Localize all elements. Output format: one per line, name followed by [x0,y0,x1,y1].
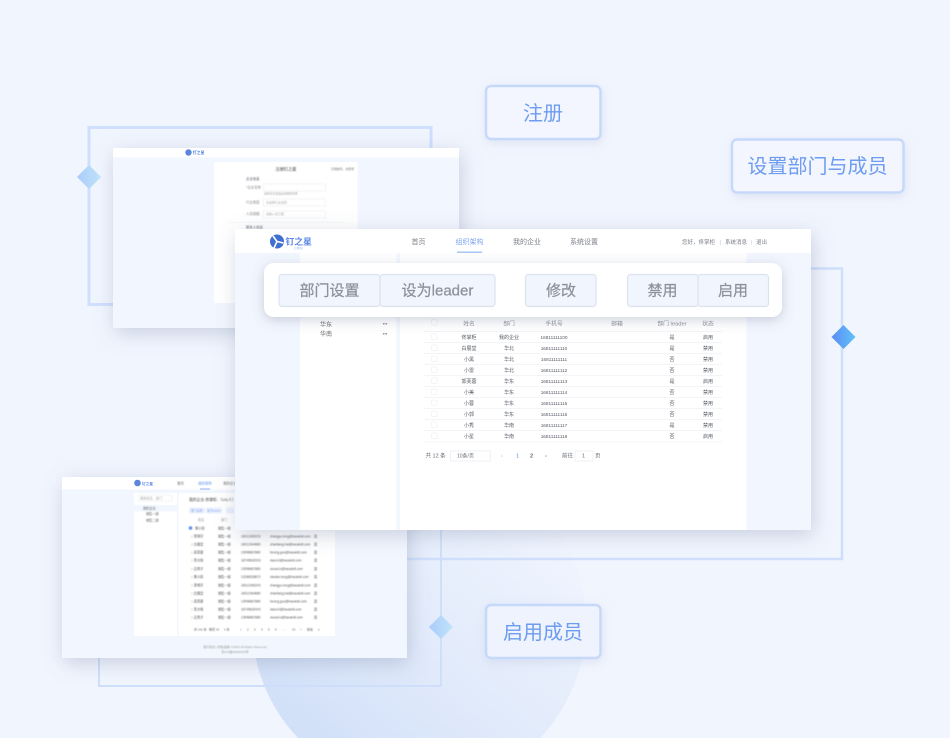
table rows: 禁用 [703,423,713,429]
table rows: 否 [669,401,675,407]
panel: members screenshot: dazui.li@baoalott.com [270,558,302,562]
panel: members screenshot: 销售一部 [218,614,232,620]
logo small: 钉之星 [142,481,153,486]
table rows: 否 [669,357,675,363]
table rows: 佟掌柜 [461,334,477,341]
table rows: 华南 [504,422,514,429]
pagination: 1 [516,454,519,460]
panel: members screenshot: 18745632003 [241,558,261,562]
table rows: 16811111115 [541,401,568,406]
panel: members screenshot: 13998667880 [241,616,261,620]
panel: members screenshot: 销售一部 [218,598,232,604]
table rows: 16811111111 [541,357,568,362]
panel: members screenshot: 销售一部 [218,534,232,538]
panel: members screenshot: 销售一部 [218,582,232,588]
user menu: 系统消息 [725,238,748,246]
table rows: 16811111112 [541,368,568,373]
logo: 钉之星 [286,236,312,246]
panel: members screenshot: 前往 [307,626,313,632]
panel: members screenshot: 1 [240,628,242,632]
register form: 企业信息 [246,176,260,181]
table rows: 16811111100 [541,335,568,340]
panel: members screenshot: 我的企业-佟掌柜-（141人） [189,497,236,502]
logo small: 钉之星 [193,150,205,155]
panel: members screenshot: 13 [292,628,296,632]
user menu: 您好，佟掌柜 [682,238,716,246]
logo small [185,149,205,156]
table rows: 禁用 [703,401,713,407]
table rows: 华南 [504,433,514,440]
user menu [682,238,767,246]
table rows: 华东 [504,411,514,418]
panel: members screenshot: 销售一部 [218,558,232,562]
pagination: 2 [530,454,533,460]
label: set departments and members [732,140,904,192]
panel: members screenshot: 2 [247,628,249,632]
table rows: 小黑 [464,356,474,363]
panel: members screenshot: 销售二部 [146,518,160,522]
button: disable: 禁用 [647,282,678,300]
table rows: 小秀 [464,422,474,429]
panel: members screenshot: 销售一部 [218,526,232,530]
panel: members screenshot: xiaolan.tong@baoalott.com [270,575,309,579]
button: disable [628,274,698,306]
table rows [461,334,713,440]
frame: department setup [400,268,842,559]
panel: members screenshot: 部门设置 [191,508,203,512]
panel: members screenshot: zhanliang.bai@baoalott.com [270,592,311,596]
footer: 帮行协议 | 隐私政策 ©2020 All Rights Reserved [203,644,267,649]
panel: members screenshot: xiucai.lv@baoalott.com [270,567,303,571]
table rows: 否 [669,390,675,396]
panel: members screenshot: 13998667880 [241,567,261,571]
table rows: 我的企业 [499,334,519,341]
member table [178,493,335,636]
panel: members screenshot: ○ 李明宇 [191,534,203,538]
panel: members screenshot: 是 [314,590,318,596]
logo small [134,480,153,486]
register form: 人员规模 [246,211,260,216]
panel: register screenshot [113,148,459,328]
table rows: 启用 [703,378,713,385]
panel: members screenshot: 共 141 条 [194,626,207,632]
button: enable: 启用 [718,282,748,300]
department tree [134,493,177,636]
panel: members screenshot: 1 [318,628,320,632]
panel: members screenshot: 每页 10 [209,626,220,632]
decorative circle [252,456,586,738]
panel: members screenshot: ○ 白展堂 [191,542,203,546]
panel: members screenshot: ○ 李大嘴 [191,606,204,612]
nav: 首页 [177,480,184,486]
frame: register [89,128,431,304]
panel: members screenshot: 4 [261,628,263,632]
panel: members screenshot: > [300,628,302,632]
member table panel [400,253,746,530]
register form: 联系人信息 [246,224,264,230]
table header: 手机号 [545,320,563,328]
department tree panel: ••• [383,322,388,326]
table header [463,320,714,328]
panel: members screenshot: 13998667880 [241,600,261,604]
panel: members screenshot: xiucai.lv@baoalott.com [270,616,303,620]
button: set as leader [380,274,495,306]
department tree panel: 华南 [320,330,332,338]
table rows: 小星 [464,433,474,440]
panel: members screenshot: 18312344880 [241,542,261,546]
table rows: 16811111116 [541,412,568,417]
panel: members screenshot: 销售一部 [218,590,232,596]
panel: members screenshot: 董小宛 [195,526,205,530]
table rows: 小雷 [464,367,474,374]
pagination: 共 12 条 [426,452,446,460]
table rows: 启用 [703,433,713,440]
table header: 状态 [702,320,714,328]
panel: members screenshot: 部门 [221,517,227,522]
table rows: 小郭 [464,411,474,418]
panel: members screenshot: zhangyu.long@baoalott.com [270,584,311,588]
panel: members screenshot: 是 [314,550,318,554]
table header: 姓名 [463,320,475,328]
table header: 邮箱 [611,320,623,328]
frame: enable members [99,500,441,686]
panel: members screenshot [62,477,407,658]
panel: members screenshot: ○ 郭芙蓉 [191,550,204,554]
table header: 部门 [503,320,515,328]
button: department settings: 部门设置 [299,282,360,300]
table rows: 郭芙蓉 [461,378,477,385]
logo [270,234,312,250]
panel: members screenshot: 18312344880 [241,592,261,596]
panel: members screenshot: ○ 吕秀才 [191,614,203,620]
panel: members screenshot: 销售一部 [218,550,232,554]
register form: *企业名称 [246,184,261,190]
table rows: 启用 [703,334,713,341]
panel: members screenshot: 是 [314,582,318,588]
panel: members screenshot: 是 [314,598,318,604]
panel: members screenshot: 18745632003 [241,608,261,612]
panel: members screenshot: 18312345203 [241,584,261,588]
department tree panel [300,253,396,530]
department tree panel: 华东 [320,320,332,328]
panel: members screenshot: 6 [275,628,277,632]
panel: members screenshot: 13998667880 [241,550,261,554]
label: enable members: 启用成员 [503,621,583,644]
panel: members screenshot: ○ 郭芙蓉 [191,598,204,604]
panel: members screenshot: furong.guo@baoalott.com [270,600,307,604]
pagination [426,451,601,461]
table rows: 华北 [504,367,514,374]
nav: 首页 [412,237,426,246]
panel: members screenshot: 搜索姓名、部门 [140,496,162,500]
toolbar [264,263,782,317]
panel: members screenshot: 是 [314,574,318,579]
nav: 我的企业 [223,480,237,486]
table rows: 是 [669,346,675,352]
table rows: 16811111110 [541,346,568,351]
panel: members screenshot: 设为leader [207,508,221,512]
panel: members screenshot: zhanliang.bai@baoalott.com [270,542,311,546]
register form: 请输入员工数 [266,211,284,216]
table rows: 华东 [504,389,514,396]
register form: 已有帐号，去登录 [331,166,354,171]
register form: 请填写企业营业执照的名称 [264,192,298,196]
pagination: › [545,454,547,460]
panel: members screenshot: ○ 白展堂 [191,590,203,596]
nav: 组织架构 [456,237,484,246]
panel: members screenshot: 是 [314,606,318,612]
table rows: 小美 [464,389,474,396]
panel: members screenshot: 是 [314,614,318,620]
table rows: 16811111113 [541,379,568,384]
button: department settings [279,274,380,306]
table rows: 禁用 [703,390,713,396]
pagination: ‹ [501,454,503,460]
panel: members screenshot: ○ 李明宇 [191,582,203,588]
nav [412,237,598,246]
button: enable [698,274,768,306]
table rows: 禁用 [703,368,713,374]
table rows: 否 [669,412,675,418]
table rows: 华东 [504,378,514,385]
panel: members screenshot: 销售一部 [218,566,232,571]
label: register [486,86,600,139]
table rows: 华北 [504,345,514,352]
panel: members screenshot: 销售一部 [218,606,232,612]
panel: members screenshot: ○ 吕秀才 [191,566,203,571]
nav [177,480,237,486]
panel: members screenshot: furong.guo@baoalott.com [270,550,307,554]
register form: 注册钉之星 [276,166,296,172]
table rows: 16811111117 [541,423,568,428]
table rows: 否 [669,368,675,374]
register form [228,166,354,230]
table rows: 华北 [504,356,514,363]
panel: members screenshot: dazui.li@baoalott.com [270,608,302,612]
table rows: 小蓉 [464,400,474,407]
logo: CRM [294,246,303,250]
pagination: 前往 [562,452,574,460]
table rows: 禁用 [703,412,713,418]
panel: members screenshot: 13288328872 [241,575,261,579]
panel: members screenshot: ○ 董小宛 [191,574,204,579]
panel: members screenshot: 是 [314,566,318,571]
icon: diamond left [77,165,101,189]
pagination: 页 [595,452,601,460]
table rows: 华东 [504,400,514,407]
nav: 我的企业 [513,237,541,246]
panel: members screenshot: 3 [254,628,256,632]
icon: diamond bottom [429,615,453,639]
footer: 京ICP备00000000号 [221,649,249,654]
table header: 部门 leader [657,320,687,328]
button: set as leader: 设为leader [402,282,473,300]
button: edit [526,274,596,306]
table rows: 16811111114 [541,390,568,395]
panel: members screenshot: 销售一部 [218,542,232,546]
button: edit: 修改 [546,282,576,300]
panel: members screenshot: 是 [314,558,318,562]
panel: members screenshot: 18312345203 [241,534,261,538]
label: enable members [486,605,600,658]
table rows: 否 [669,434,675,440]
panel: members screenshot: 1 条 [224,626,230,632]
panel: members screenshot: … [283,628,286,632]
icon: diamond right [832,325,856,349]
table rows: 禁用 [703,357,713,363]
label: register: 注册 [523,102,563,125]
table rows: 是 [669,379,675,385]
panel: members screenshot: zhangyu.long@baoalott.com [270,534,311,538]
table rows: 白展堂 [461,345,477,352]
pagination: 10条/页 [457,452,474,460]
panel: members screenshot: ○ 李大嘴 [191,558,204,562]
nav: 组织架构 [198,480,212,486]
panel: members screenshot: 销售一部 [146,511,160,516]
nav: 系统设置 [570,237,598,246]
register form: 请选择行业类型 [266,200,287,204]
table rows: 是 [669,423,675,429]
register form: 行业类型 [246,200,260,204]
panel: members screenshot: 是 [314,534,318,538]
user menu: 退出 [756,238,767,246]
footer [203,644,267,654]
pagination: 1 [582,454,585,460]
panel: members screenshot: 销售一部 [218,574,232,579]
panel: members screenshot: 我的企业 [143,506,156,510]
table rows: 禁用 [703,346,713,352]
panel: organization screenshot [235,229,811,530]
panel: members screenshot: 是 [314,542,318,546]
panel: members screenshot: 5 [268,628,270,632]
table rows: 是 [669,335,675,341]
label: set departments and members: 设置部门与成员 [748,155,888,178]
table rows: 16811111118 [541,434,568,439]
panel: members screenshot: 姓名 [198,517,204,522]
department tree panel: ••• [383,332,388,336]
